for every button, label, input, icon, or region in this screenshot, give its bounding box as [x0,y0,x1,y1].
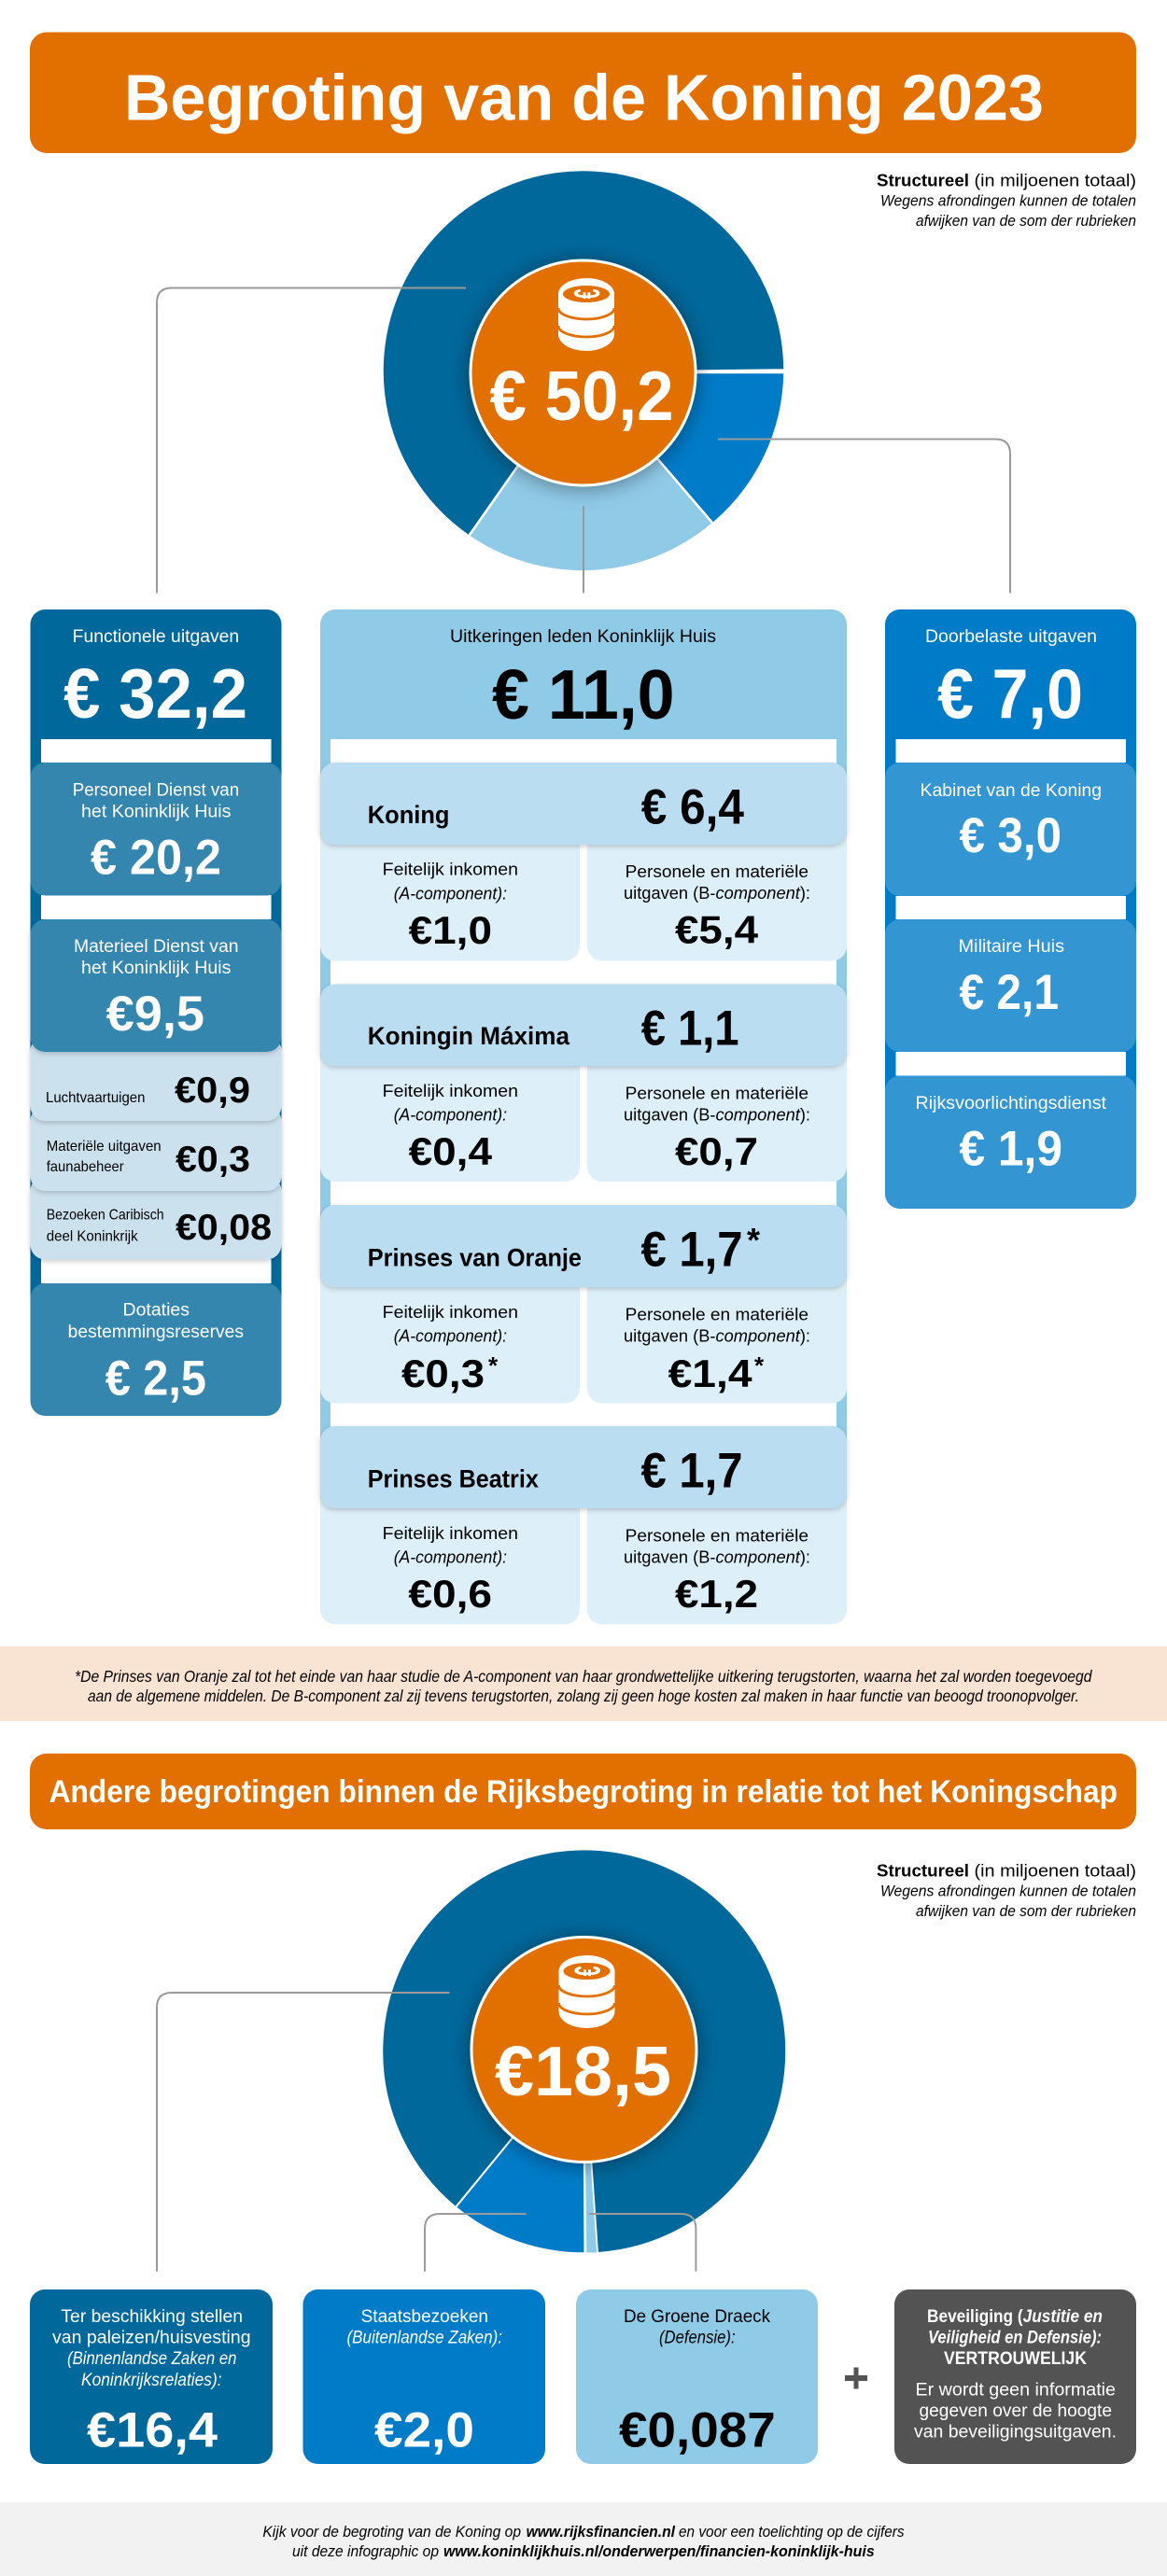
card: materieel: Materieel Dienst van [74,937,239,957]
card: personeel [30,763,282,896]
card: ter beschikking stellen: Koninkrijksrelaties): [81,2371,222,2390]
header: prinses beatrix: € 1,7 [640,1443,743,1499]
header: koningin maxima: € 1,1 [641,1001,739,1057]
card: beatrix A-component [320,1485,580,1624]
donut centre circle [471,1938,696,2162]
card: personeel: Personeel Dienst van [73,780,239,800]
card: koning B-component: uitgaven (B-component): [624,884,810,903]
amount: 7,0: € 7,0 [937,655,1083,734]
connector: groene draeck [589,2214,696,2272]
footer band: uit deze infographic op [292,2542,439,2560]
card: beveiliging: gegeven over de hoogte [919,2401,1112,2421]
card: materiele uitgaven faunabeheer: Materiële uitgaven [47,1139,162,1155]
card: beatrix B-component: €1,2 [675,1572,758,1616]
header: prinses van oranje: € 1,7 [640,1223,743,1278]
header: prinses van oranje [320,1205,847,1287]
card: maxima B-component: Personele en materiële [626,1085,808,1103]
card: kabinet van de koning [885,763,1136,896]
card: de groene draeck [576,2289,818,2464]
footer band [0,2502,1167,2576]
card: ter beschikking stellen: (Binnenlandse Zaken en [67,2349,237,2369]
card: beatrix A-component: Feitelijk inkomen [383,1524,518,1543]
donut centre circle [471,260,696,485]
card: maxima A-component [320,1043,580,1182]
card: koning A-component: €1,0 [409,908,492,952]
slice: uitkeringen [469,372,713,571]
group: prinses beatrix [320,1426,847,1624]
card: rijksvoorlichtingsdienst: Rijksvoorlichtingsdienst [915,1094,1107,1113]
card: beveiliging: Veiligheid en Defensie): [928,2329,1102,2348]
card: de groene draeck: €0,087 [619,2403,776,2458]
icon: coins: € [567,289,608,299]
title banner [30,32,1136,153]
card: oranje A-component: * [488,1351,499,1379]
footer band: www.rijksfinancien.nl [527,2523,676,2541]
icon: coins [558,1955,614,2028]
total amount: € 50,2 [489,357,674,435]
section banner: Andere begrotingen binnen de Rijksbegroting in relatie tot het Koningschap [49,1774,1118,1810]
footer band: en voor een toelichting op de cijfers [679,2523,905,2541]
card: ter beschikking stellen [30,2289,273,2464]
card: maxima B-component: uitgaven (B-component): [624,1105,810,1124]
card: staatsbezoeken: (Buitenlandse Zaken): [347,2329,502,2348]
heading: uitkeringen: Uitkeringen leden Koninklijk Huis [450,627,716,647]
card: ter beschikking stellen: van paleizen/huisvesting [52,2329,251,2348]
card: luchtvaartuigen: Luchtvaartuigen [46,1090,145,1106]
header: prinses van oranje: * [747,1221,760,1259]
total amount: €18,5 [495,2032,671,2110]
header: koning: Koning [368,801,450,829]
card: oranje B-component [587,1264,847,1404]
card: luchtvaartuigen: €0,9 [175,1071,250,1111]
slice: staatsbezoeken [456,2051,584,2253]
card: koning A-component [320,821,580,961]
card: oranje A-component: €0,3 [401,1351,485,1395]
group: koning [320,763,847,961]
card: maxima B-component: €0,7 [675,1129,758,1173]
header: prinses van oranje: Prinses van Oranje [368,1244,582,1272]
card: maxima A-component: (A-component): [394,1105,507,1124]
card: personeel: € 20,2 [91,831,221,886]
unit note second: Wegens afrondingen kunnen de totalen [880,1882,1136,1899]
card: koning B-component: €5,4 [675,907,759,952]
footer band: Kijk voor de begroting van de Koning op [262,2523,521,2541]
card: militaire huis: € 2,1 [960,965,1059,1020]
card: beatrix A-component: (A-component): [394,1547,507,1566]
header: koning [320,763,847,845]
card: materiele uitgaven faunabeheer [30,1106,282,1191]
card: bezoeken caribisch [30,1176,282,1260]
card: oranje A-component: (A-component): [394,1327,507,1346]
card: beatrix B-component [587,1485,847,1624]
donut chart: begroting 50,2 [383,170,784,571]
card: de groene draeck: De Groene Draeck [624,2307,770,2327]
group: koningin maxima [320,984,847,1182]
card: bezoeken caribisch: €0,08 [176,1208,272,1248]
card: personeel: het Koninklijk Huis [81,803,232,822]
panel: doorbelaste uitgaven [885,609,1136,1209]
unit note second: afwijken van de som der rubrieken [916,1902,1136,1920]
icon: plus [845,2367,867,2389]
unit note top [877,172,1136,230]
card: materieel [30,919,282,1052]
card: oranje B-component: Personele en materiële [626,1305,808,1323]
card: beatrix A-component: €0,6 [408,1572,492,1616]
card: oranje A-component [320,1264,580,1404]
card: oranje B-component: uitgaven (B-component): [624,1327,810,1346]
slice: paleizen [382,1849,786,2253]
card: staatsbezoeken [302,2289,545,2464]
connector: uitkeringen [583,506,584,594]
card: maxima A-component: €0,4 [409,1129,493,1173]
slice: groene draeck [584,2051,598,2253]
unit note top: (in miljoenen totaal) [975,172,1136,190]
card: materieel: het Koninklijk Huis [81,959,232,978]
header: prinses beatrix: Prinses Beatrix [368,1465,539,1493]
card: militaire huis [885,919,1136,1052]
header: koningin maxima [320,984,847,1066]
icon: coins [558,278,614,351]
footer band: www.koninklijkhuis.nl/onderwerpen/financien-koninklijk-huis [443,2542,875,2560]
card: beveiliging: VERTROUWELIJK [944,2349,1087,2369]
card: beatrix B-component: Personele en materiële [626,1527,808,1546]
group: prinses van oranje [320,1205,847,1404]
card: bezoeken caribisch: deel Koninkrijk [47,1229,139,1245]
card: beveiliging: Beveiliging (Justitie en [927,2307,1103,2327]
card: ter beschikking stellen: Ter beschikking stellen [61,2307,243,2327]
donut chart: andere begrotingen 18,5 [382,1849,786,2253]
card: luchtvaartuigen [30,1036,282,1121]
card: kabinet van de koning: € 3,0 [960,808,1062,863]
slice: functionele uitgaven [383,170,784,536]
heading: doorbelaste uitgaven: Doorbelaste uitgaven [925,627,1097,647]
card: rijksvoorlichtingsdienst [885,1075,1136,1209]
card: de groene draeck: (Defensie): [659,2329,736,2348]
unit note top: Wegens afrondingen kunnen de totalen [880,192,1136,209]
header: koningin maxima: Koningin Máxima [368,1022,570,1050]
header: koning: € 6,4 [641,779,744,834]
card: ter beschikking stellen: €16,4 [87,2403,218,2458]
panel: uitkeringen leden koninklijk huis [320,609,847,1626]
amount: 32,2: € 32,2 [63,654,247,733]
footnote band [0,1646,1167,1721]
unit note second [877,1862,1136,1920]
card: koning B-component [587,821,847,961]
card: beveiliging [894,2289,1136,2464]
unit note top: Structureel [877,172,969,190]
header: prinses beatrix [320,1426,847,1508]
section banner [30,1754,1136,1829]
card: koning A-component: (A-component): [394,884,507,903]
card: oranje A-component: Feitelijk inkomen [383,1303,518,1322]
card: rijksvoorlichtingsdienst: € 1,9 [960,1122,1062,1176]
title banner: Begroting van de Koning 2023 [124,62,1044,134]
card: dotaties [30,1283,282,1416]
unit note second: (in miljoenen totaal) [975,1862,1136,1881]
amount: 11,0: € 11,0 [492,655,675,734]
card: militaire huis: Militaire Huis [959,937,1064,957]
card: kabinet van de koning: Kabinet van de Koning [921,781,1102,801]
card: materiele uitgaven faunabeheer: faunabeheer [47,1159,124,1175]
card: oranje B-component: €1,4 [668,1351,752,1395]
card: maxima A-component: Feitelijk inkomen [383,1082,518,1100]
card: beveiliging: Er wordt geen informatie [915,2381,1116,2401]
icon: coins: € [567,1967,608,1976]
card: dotaties: bestemmingsreserves [68,1323,244,1342]
card: beveiliging: van beveiligingsuitgaven. [914,2423,1117,2443]
card: staatsbezoeken: Staatsbezoeken [361,2307,488,2327]
card: dotaties: € 2,5 [105,1351,206,1407]
card: materieel: €9,5 [106,987,204,1042]
card: materiele uitgaven faunabeheer: €0,3 [176,1140,250,1180]
card: maxima B-component [587,1043,847,1182]
connector: paleizen [157,1993,450,2272]
panel: functionele uitgaven [30,609,282,1416]
connector: functionele uitgaven [157,287,466,594]
card: staatsbezoeken: €2,0 [374,2403,474,2458]
card: oranje B-component: * [754,1351,765,1379]
card: koning B-component: Personele en materiële [626,862,808,881]
slice: doorbelaste uitgaven [584,372,784,524]
card: koning A-component: Feitelijk inkomen [383,861,518,879]
card: bezoeken caribisch: Bezoeken Caribisch [47,1208,164,1223]
connector: staatsbezoeken [425,2214,527,2272]
card: beatrix B-component: uitgaven (B-component): [624,1547,810,1566]
connector: doorbelaste uitgaven [718,439,1010,594]
card: dotaties: Dotaties [123,1301,190,1321]
unit note second: Structureel [877,1862,969,1881]
heading: functionele uitgaven: Functionele uitgaven [73,627,239,647]
unit note top: afwijken van de som der rubrieken [916,212,1136,230]
